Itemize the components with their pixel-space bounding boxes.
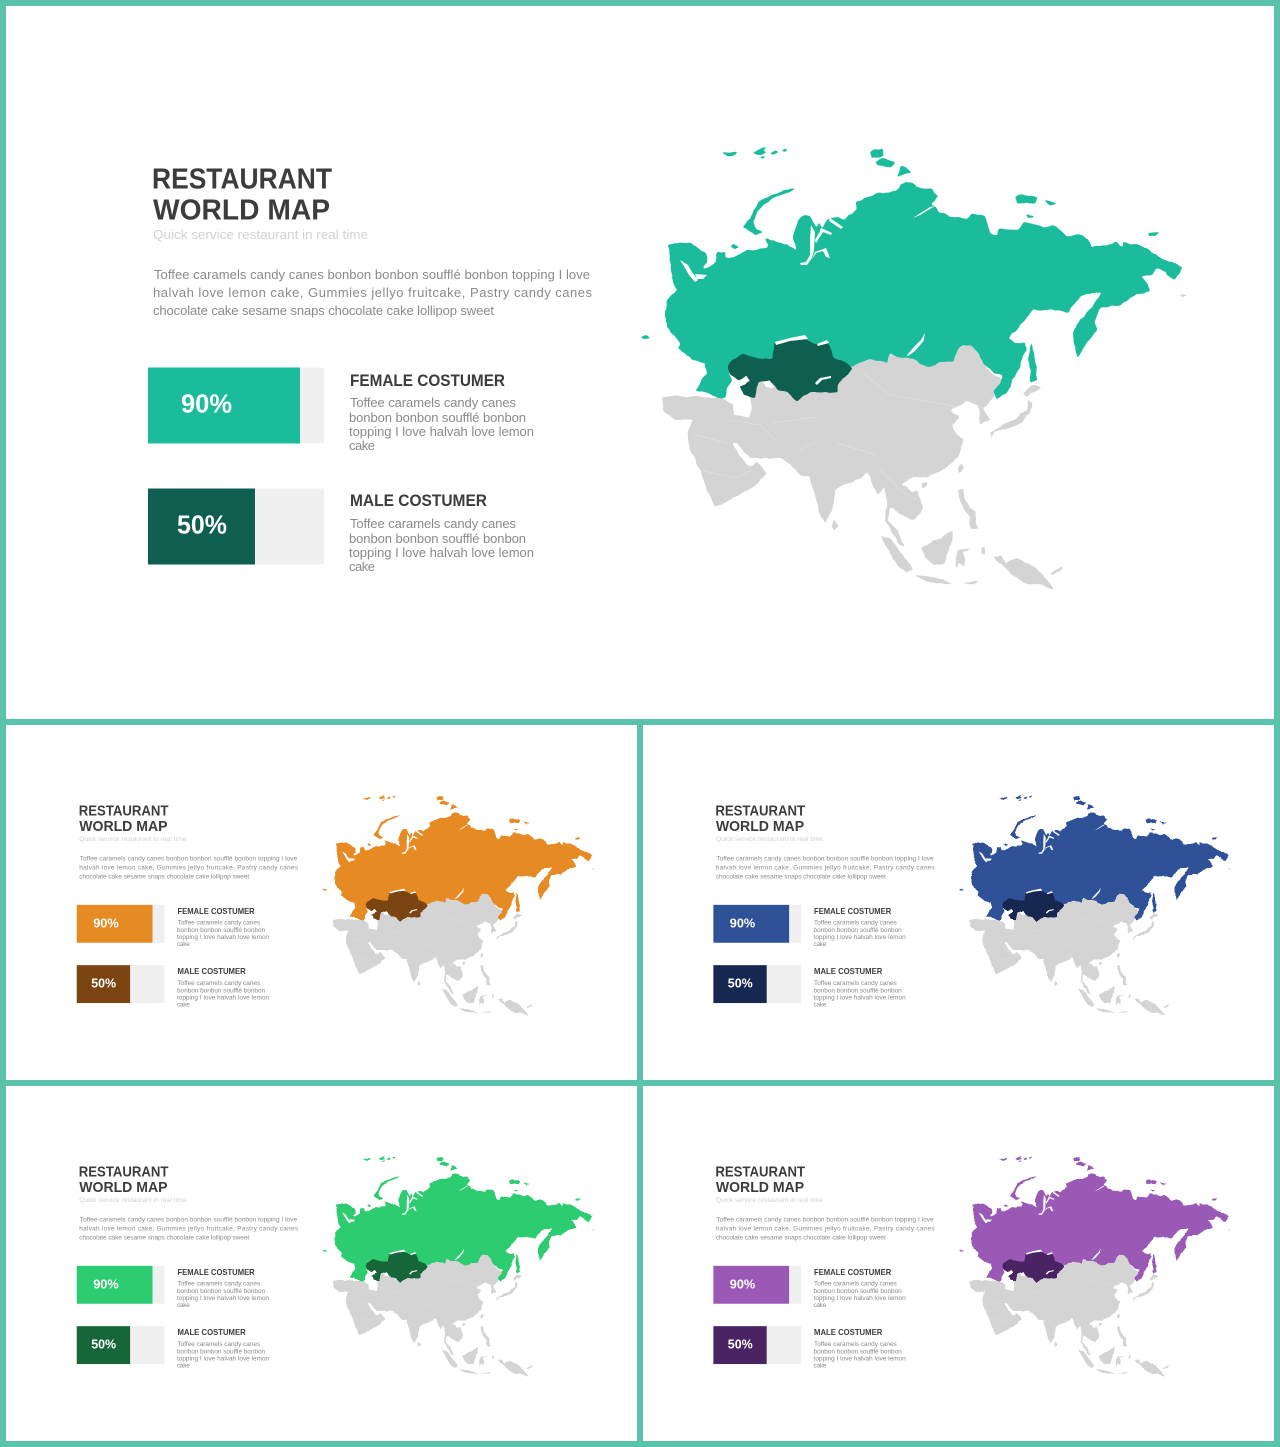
title: RESTAURANT: [79, 804, 169, 820]
male costumer text: bonbon bonbon soufflé bonbon: [814, 1348, 902, 1355]
panel: purple slide: [643, 1086, 1274, 1441]
male costumer text: MALE COSTUMER: [177, 1327, 246, 1337]
bar: female 90%: [77, 905, 164, 943]
bar: female 90%: 90%: [181, 388, 232, 418]
bar: male 50%: [77, 1326, 164, 1364]
body text: chocolate cake sesame snaps chocolate cake lollipop sweet: [79, 1235, 249, 1242]
body text: halvah love lemon cake, Gummies jellyo fruitcake, Pastry candy canes: [79, 865, 298, 872]
bar: male 50%: 50%: [91, 976, 117, 991]
male costumer text: Toffee caramels candy canes: [814, 980, 897, 987]
female costumer text: cake: [177, 941, 190, 948]
bar: male 50%: 50%: [177, 510, 227, 540]
female costumer text: Toffee caramels candy canes: [814, 1281, 897, 1288]
body text: chocolate cake sesame snaps chocolate cake lollipop sweet: [153, 303, 494, 318]
map: Eurasia, teal: [640, 146, 1188, 590]
male costumer text: MALE COSTUMER: [814, 1327, 882, 1337]
female costumer text: [814, 1267, 906, 1309]
map: Eurasia, green: [322, 1155, 595, 1377]
title: RESTAURANT: [79, 1165, 169, 1181]
male costumer text: [814, 1327, 906, 1369]
female costumer text: FEMALE COSTUMER: [177, 906, 255, 916]
male costumer text: topping I love halvah love lemon: [349, 545, 534, 560]
body text: Toffee caramels candy canes bonbon bonbon soufflé bonbon topping I love: [716, 1217, 934, 1224]
female costumer text: topping I love halvah love lemon: [177, 934, 270, 941]
female costumer text: topping I love halvah love lemon: [349, 424, 534, 439]
subtitle: Quick service restaurant in real time: [79, 1197, 187, 1204]
male costumer text: [177, 1327, 270, 1369]
bar: female 90%: 90%: [93, 1276, 119, 1291]
female costumer text: [177, 1267, 270, 1309]
female costumer text: Toffee caramels candy canes: [177, 920, 260, 927]
female costumer text: cake: [349, 438, 375, 453]
female costumer text: cake: [814, 941, 827, 948]
male costumer text: MALE COSTUMER: [350, 491, 487, 510]
bar: female 90%: [148, 368, 324, 444]
bar: male 50%: [77, 965, 164, 1003]
female costumer text: FEMALE COSTUMER: [814, 1267, 891, 1277]
bar: female 90%: [713, 1266, 801, 1304]
bar: male 50%: [148, 488, 324, 564]
female costumer text: topping I love halvah love lemon: [814, 1295, 906, 1302]
bar: male 50%: 50%: [728, 976, 753, 991]
female costumer text: [814, 906, 906, 948]
bar: male 50%: [713, 1326, 801, 1364]
female costumer text: cake: [177, 1302, 190, 1309]
female costumer text: Toffee caramels candy canes: [177, 1281, 260, 1288]
female costumer text: Toffee caramels candy canes: [350, 395, 516, 410]
title: WORLD MAP: [153, 194, 330, 226]
title: RESTAURANT: [715, 804, 805, 820]
title: [715, 804, 805, 835]
female costumer text: topping I love halvah love lemon: [814, 934, 906, 941]
male costumer text: topping I love halvah love lemon: [177, 1355, 270, 1362]
title: [79, 804, 169, 835]
female costumer text: topping I love halvah love lemon: [177, 1295, 270, 1302]
body text: [79, 1217, 298, 1242]
male costumer text: topping I love halvah love lemon: [177, 994, 270, 1001]
panel: main teal slide: [6, 6, 1274, 719]
body text: halvah love lemon cake, Gummies jellyo fruitcake, Pastry candy canes: [716, 1226, 935, 1233]
male costumer text: Toffee caramels candy canes: [177, 980, 260, 987]
body text: [153, 267, 592, 318]
title: [79, 1165, 169, 1196]
female costumer text: bonbon bonbon soufflé bonbon: [814, 1288, 902, 1295]
bar: male 50%: 50%: [91, 1337, 117, 1352]
male costumer text: bonbon bonbon soufflé bonbon: [177, 1348, 266, 1355]
title: WORLD MAP: [79, 819, 168, 835]
female costumer text: [349, 371, 534, 453]
title: [152, 164, 332, 226]
title: WORLD MAP: [716, 1180, 804, 1196]
female costumer text: [177, 906, 270, 948]
male costumer text: Toffee caramels candy canes: [814, 1341, 897, 1348]
body text: Toffee caramels candy canes bonbon bonbon soufflé bonbon topping I love: [716, 856, 934, 863]
female costumer text: Toffee caramels candy canes: [814, 920, 897, 927]
male costumer text: [177, 966, 270, 1008]
male costumer text: bonbon bonbon soufflé bonbon: [349, 531, 526, 546]
map: Eurasia, purple: [959, 1155, 1232, 1377]
subtitle: Quick service restaurant in real time: [716, 836, 823, 843]
title: WORLD MAP: [716, 819, 804, 835]
female costumer text: FEMALE COSTUMER: [177, 1267, 255, 1277]
title: WORLD MAP: [79, 1180, 168, 1196]
bar: female 90%: 90%: [730, 915, 756, 930]
body text: chocolate cake sesame snaps chocolate cake lollipop sweet: [716, 1235, 886, 1242]
subtitle: Quick service restaurant in real time: [716, 1197, 823, 1204]
male costumer text: cake: [177, 1001, 190, 1008]
bar: male 50%: [713, 965, 801, 1003]
male costumer text: bonbon bonbon soufflé bonbon: [814, 987, 902, 994]
body text: [79, 856, 298, 881]
body text: Toffee caramels candy canes bonbon bonbon soufflé bonbon topping I love: [80, 1217, 297, 1224]
body text: halvah love lemon cake, Gummies jellyo fruitcake, Pastry candy canes: [153, 285, 592, 300]
body text: [716, 1217, 935, 1242]
female costumer text: cake: [814, 1302, 827, 1309]
male costumer text: topping I love halvah love lemon: [814, 1355, 906, 1362]
bar: female 90%: [713, 905, 801, 943]
body text: Toffee caramels candy canes bonbon bonbon soufflé bonbon topping I love: [154, 267, 590, 282]
title: RESTAURANT: [715, 1165, 805, 1181]
male costumer text: cake: [349, 559, 375, 574]
bar: male 50%: 50%: [728, 1337, 753, 1352]
male costumer text: MALE COSTUMER: [177, 966, 246, 976]
body text: halvah love lemon cake, Gummies jellyo fruitcake, Pastry candy canes: [79, 1226, 298, 1233]
map: Eurasia, orange: [322, 794, 595, 1016]
body text: halvah love lemon cake, Gummies jellyo fruitcake, Pastry candy canes: [716, 865, 935, 872]
female costumer text: FEMALE COSTUMER: [350, 371, 505, 390]
female costumer text: bonbon bonbon soufflé bonbon: [177, 1288, 266, 1295]
body text: chocolate cake sesame snaps chocolate cake lollipop sweet: [716, 874, 886, 881]
male costumer text: [814, 966, 906, 1008]
map: Eurasia, blue: [959, 794, 1232, 1016]
bar: female 90%: 90%: [730, 1276, 756, 1291]
male costumer text: [349, 491, 534, 574]
male costumer text: MALE COSTUMER: [814, 966, 882, 976]
female costumer text: bonbon bonbon soufflé bonbon: [177, 927, 266, 934]
male costumer text: cake: [814, 1362, 827, 1369]
panel: green slide: [6, 1086, 637, 1441]
male costumer text: topping I love halvah love lemon: [814, 994, 906, 1001]
bar: female 90%: 90%: [93, 915, 119, 930]
male costumer text: cake: [814, 1001, 827, 1008]
bar: female 90%: [77, 1266, 164, 1304]
title: RESTAURANT: [152, 164, 332, 196]
panel: orange slide: [6, 725, 637, 1080]
female costumer text: bonbon bonbon soufflé bonbon: [349, 410, 526, 425]
male costumer text: Toffee caramels candy canes: [350, 516, 516, 531]
male costumer text: cake: [177, 1362, 190, 1369]
body text: chocolate cake sesame snaps chocolate cake lollipop sweet: [79, 874, 249, 881]
subtitle: Quick service restaurant in real time: [153, 227, 368, 242]
body text: [716, 856, 935, 881]
female costumer text: FEMALE COSTUMER: [814, 906, 891, 916]
panel: blue slide: [643, 725, 1274, 1080]
male costumer text: Toffee caramels candy canes: [177, 1341, 260, 1348]
title: [715, 1165, 805, 1196]
subtitle: Quick service restaurant in real time: [79, 836, 187, 843]
female costumer text: bonbon bonbon soufflé bonbon: [814, 927, 902, 934]
male costumer text: bonbon bonbon soufflé bonbon: [177, 987, 266, 994]
body text: Toffee caramels candy canes bonbon bonbon soufflé bonbon topping I love: [80, 856, 297, 863]
